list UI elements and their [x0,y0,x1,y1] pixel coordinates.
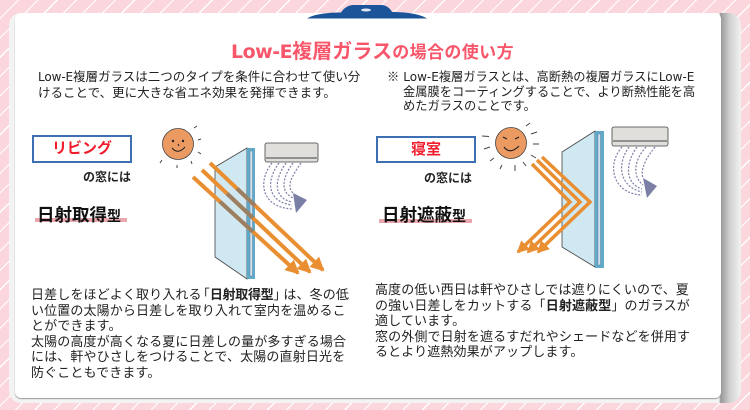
text block: intro [38,70,360,100]
cool air flow [614,147,657,198]
caption: living window: の窓には [83,170,131,184]
text block: solar shielding description: の強い日差しをカットする「日射遮蔽型」のガラスが [375,298,690,313]
caption: bedroom window: の窓には [424,171,472,185]
text block: intro: けることで、更に大きな省エネ効果を発揮できます。 [38,86,336,100]
label box: living: リビング [52,140,112,157]
text block: intro: Low-E複層ガラスは二つのタイプを条件に合わせて使い分 [38,70,360,84]
heading: solar shielding type: 日射遮蔽型 [382,205,466,225]
text block: solar gain description: い位置の太陽から日差しを取り入れて室内を温めるこ [31,303,346,318]
text block: note: めたガラスのことです。 [403,99,536,113]
text block: solar gain description: 日差しをほどよく取り入れる「日射取得型」は、冬の低 [31,287,349,302]
sun rays transmitted [193,163,323,273]
text block: solar shielding description: るとより遮熱効果がアップします。 [375,344,584,359]
label box: bedroom: 寝室 [411,141,441,158]
text block: solar gain description [31,287,349,380]
text block: note [387,70,695,113]
icon: air conditioner [265,143,318,162]
title: Low-E複層ガラスの場合の使い方 [231,41,514,63]
sun rays reflected [518,157,590,252]
text block: solar shielding description: 窓の外側で日射を遮るすだれやシェードなどを併用す [375,329,690,344]
text block: note: 金属膜をコーティングすることで、より断熱性能を高 [403,85,695,99]
icon: glass pane [562,131,604,268]
icon: sun smiling [160,126,201,168]
text block: solar gain description: とができます。 [31,318,122,333]
text block: solar shielding description: 高度の低い西日は軒やひさしでは遮りにくいので、夏 [375,282,689,297]
underline: solar shielding [379,219,472,223]
text block: note: ※ Low-E複層ガラスとは、高断熱の複層ガラスにLow-E [387,70,694,84]
cool air flow [264,163,307,213]
text block: solar gain description: 太陽の高度が高くなる夏に日差しの量が多すぎる場合 [31,334,346,349]
icon: sun determined [482,123,539,171]
label box: living [32,135,132,163]
icon: glass pane [215,148,255,279]
text block: solar shielding description: 適しています。 [375,313,465,328]
underline: solar gain [35,218,127,222]
label box: bedroom [376,136,476,163]
icon: air conditioner [612,127,668,146]
heading: solar gain type: 日射取得型 [37,205,121,225]
text block: solar shielding description [375,282,690,359]
text block: solar gain description: 防ぐこともできます。 [31,365,160,380]
text block: solar gain description: には、軒やひさしをつけることで、太陽の直射日光を [31,349,345,364]
